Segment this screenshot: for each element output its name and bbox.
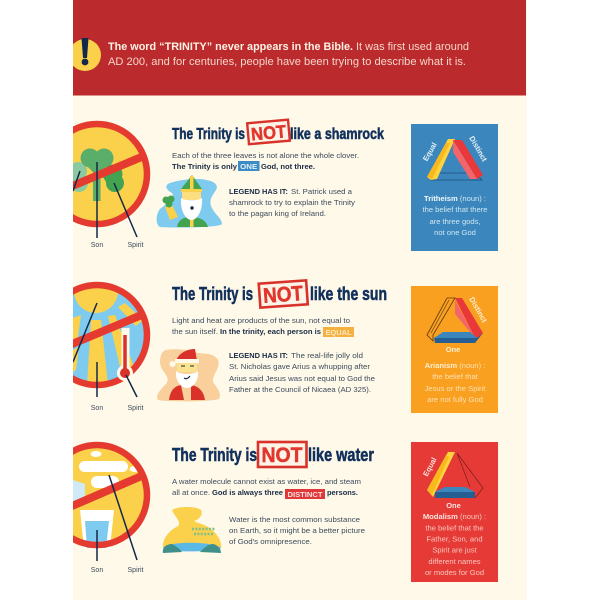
label: Spirit: Spirit: [128, 567, 144, 574]
fact text: [229, 515, 365, 546]
legend text: Father at the Council of Nicaea (AD 325).: [229, 385, 371, 394]
body text: EQUAL: [326, 328, 352, 337]
diagram: triangle: Distinct: [467, 134, 489, 164]
body text: [172, 151, 359, 171]
diagram: triangle: Equal: [421, 456, 438, 478]
legend text: St. Patrick used a: [291, 187, 352, 196]
body text: The Trinity is only: [172, 162, 237, 171]
card text: the belief that: [432, 372, 479, 381]
body text: God, not three.: [261, 162, 315, 171]
card text: [423, 512, 486, 577]
illustration: shamrock in prohibition circle: [73, 120, 150, 238]
card text: Tritheism (noun) :: [424, 194, 486, 203]
legend text: Arius said Jesus was not equal to God the: [229, 374, 375, 383]
card text: [425, 361, 486, 404]
card text: Modalism (noun) :: [423, 512, 486, 521]
card: Arianism: [411, 286, 498, 413]
heading: [172, 280, 387, 308]
card text: Spirit are just: [432, 546, 478, 554]
label: Spirit: Spirit: [128, 405, 144, 412]
icon: Saint Patrick: [157, 175, 222, 228]
card: Tritheism: [411, 124, 498, 251]
label: Son: Son: [91, 242, 103, 249]
stamp: NOT: NOT: [262, 282, 304, 308]
heading: [172, 442, 374, 467]
body text: ONE: [240, 162, 257, 171]
fact text: of God's omnipresence.: [229, 537, 312, 546]
illustration: sun in prohibition circle: [73, 282, 150, 398]
legend text: [229, 351, 375, 394]
diagram: triangle: [427, 295, 489, 354]
body text: all at once.: [172, 488, 210, 497]
legend text: The real-life jolly old: [291, 351, 363, 360]
heading: like a shamrock: [290, 126, 384, 143]
panel: sun: [73, 279, 498, 413]
panel: water: [47, 442, 498, 582]
diagram: triangle: [421, 134, 489, 180]
heading: The Trinity is: [172, 445, 257, 465]
diagram: triangle: One: [446, 345, 460, 354]
header text: The word “TRINITY” never appears in the Bible.: [108, 41, 353, 53]
card text: the belief that there: [422, 205, 488, 214]
body text: In the trinity, each person is: [220, 327, 321, 336]
icon: Santa Claus: [157, 349, 220, 401]
legend text: to the pagan king of Ireland.: [229, 209, 326, 218]
body text: Light and heat are products of the sun, not equal to: [172, 316, 350, 325]
card text: or modes for God: [425, 568, 484, 577]
card text: are three gods,: [429, 217, 481, 226]
body text: [172, 477, 361, 499]
legend text: LEGEND HAS IT:: [229, 187, 288, 196]
header text: AD 200, and for centuries, people have been trying to describe what it is.: [108, 56, 466, 68]
diagram: triangle: One: [446, 501, 461, 510]
icon: exclamation mark: [73, 38, 101, 71]
card text: Arianism (noun) :: [425, 361, 485, 370]
fact text: Water is the most common substance: [229, 515, 360, 524]
card: Modalism: [411, 442, 498, 582]
heading: The Trinity is: [172, 284, 253, 304]
card text: [422, 194, 488, 237]
card text: the belief that the: [425, 524, 484, 532]
diagram: triangle: Equal: [421, 141, 439, 163]
legend text: LEGEND HAS IT:: [229, 351, 288, 360]
heading: The Trinity is: [172, 126, 245, 143]
stamp: NOT: NOT: [262, 444, 303, 467]
body text: A water molecule cannot exist as water, ice, and steam: [172, 477, 361, 486]
heading: [172, 120, 384, 145]
icon: water landscape: [163, 507, 221, 553]
legend text: shamrock to try to explain the Trinity: [229, 198, 355, 207]
card text: Father, Son, and: [426, 534, 483, 544]
illustration: water forms in prohibition circle: [73, 442, 150, 561]
header text: [108, 41, 469, 68]
header text: It was first used around: [356, 41, 469, 53]
body text: Each of the three leaves is not alone the whole clover.: [172, 151, 359, 160]
header banner: [69, 0, 526, 96]
label: Son: Son: [91, 405, 103, 412]
body text: [172, 316, 354, 337]
panel: shamrock: [47, 120, 498, 251]
label: Spirit: Spirit: [128, 242, 144, 249]
label: Son: Son: [91, 567, 103, 574]
heading: like water: [308, 445, 374, 465]
legend text: St. Nicholas gave Arius a whupping after: [229, 362, 371, 371]
body text: God is always three: [212, 488, 283, 497]
diagram: triangle: [421, 452, 483, 510]
heading: like the sun: [310, 284, 387, 304]
card text: different names: [428, 557, 481, 566]
legend text: [229, 187, 355, 218]
diagram: triangle: Distinct: [467, 295, 489, 325]
card text: are not fully God: [427, 395, 483, 404]
stamp: NOT: NOT: [250, 121, 287, 144]
fact text: on Earth, so it might be a better picture: [229, 526, 365, 535]
card text: Jesus or the Spirit: [425, 384, 486, 393]
card text: not one God: [434, 228, 476, 237]
body text: persons.: [327, 488, 358, 497]
body text: the sun itself.: [172, 327, 218, 336]
body text: DISTINCT: [288, 490, 323, 499]
